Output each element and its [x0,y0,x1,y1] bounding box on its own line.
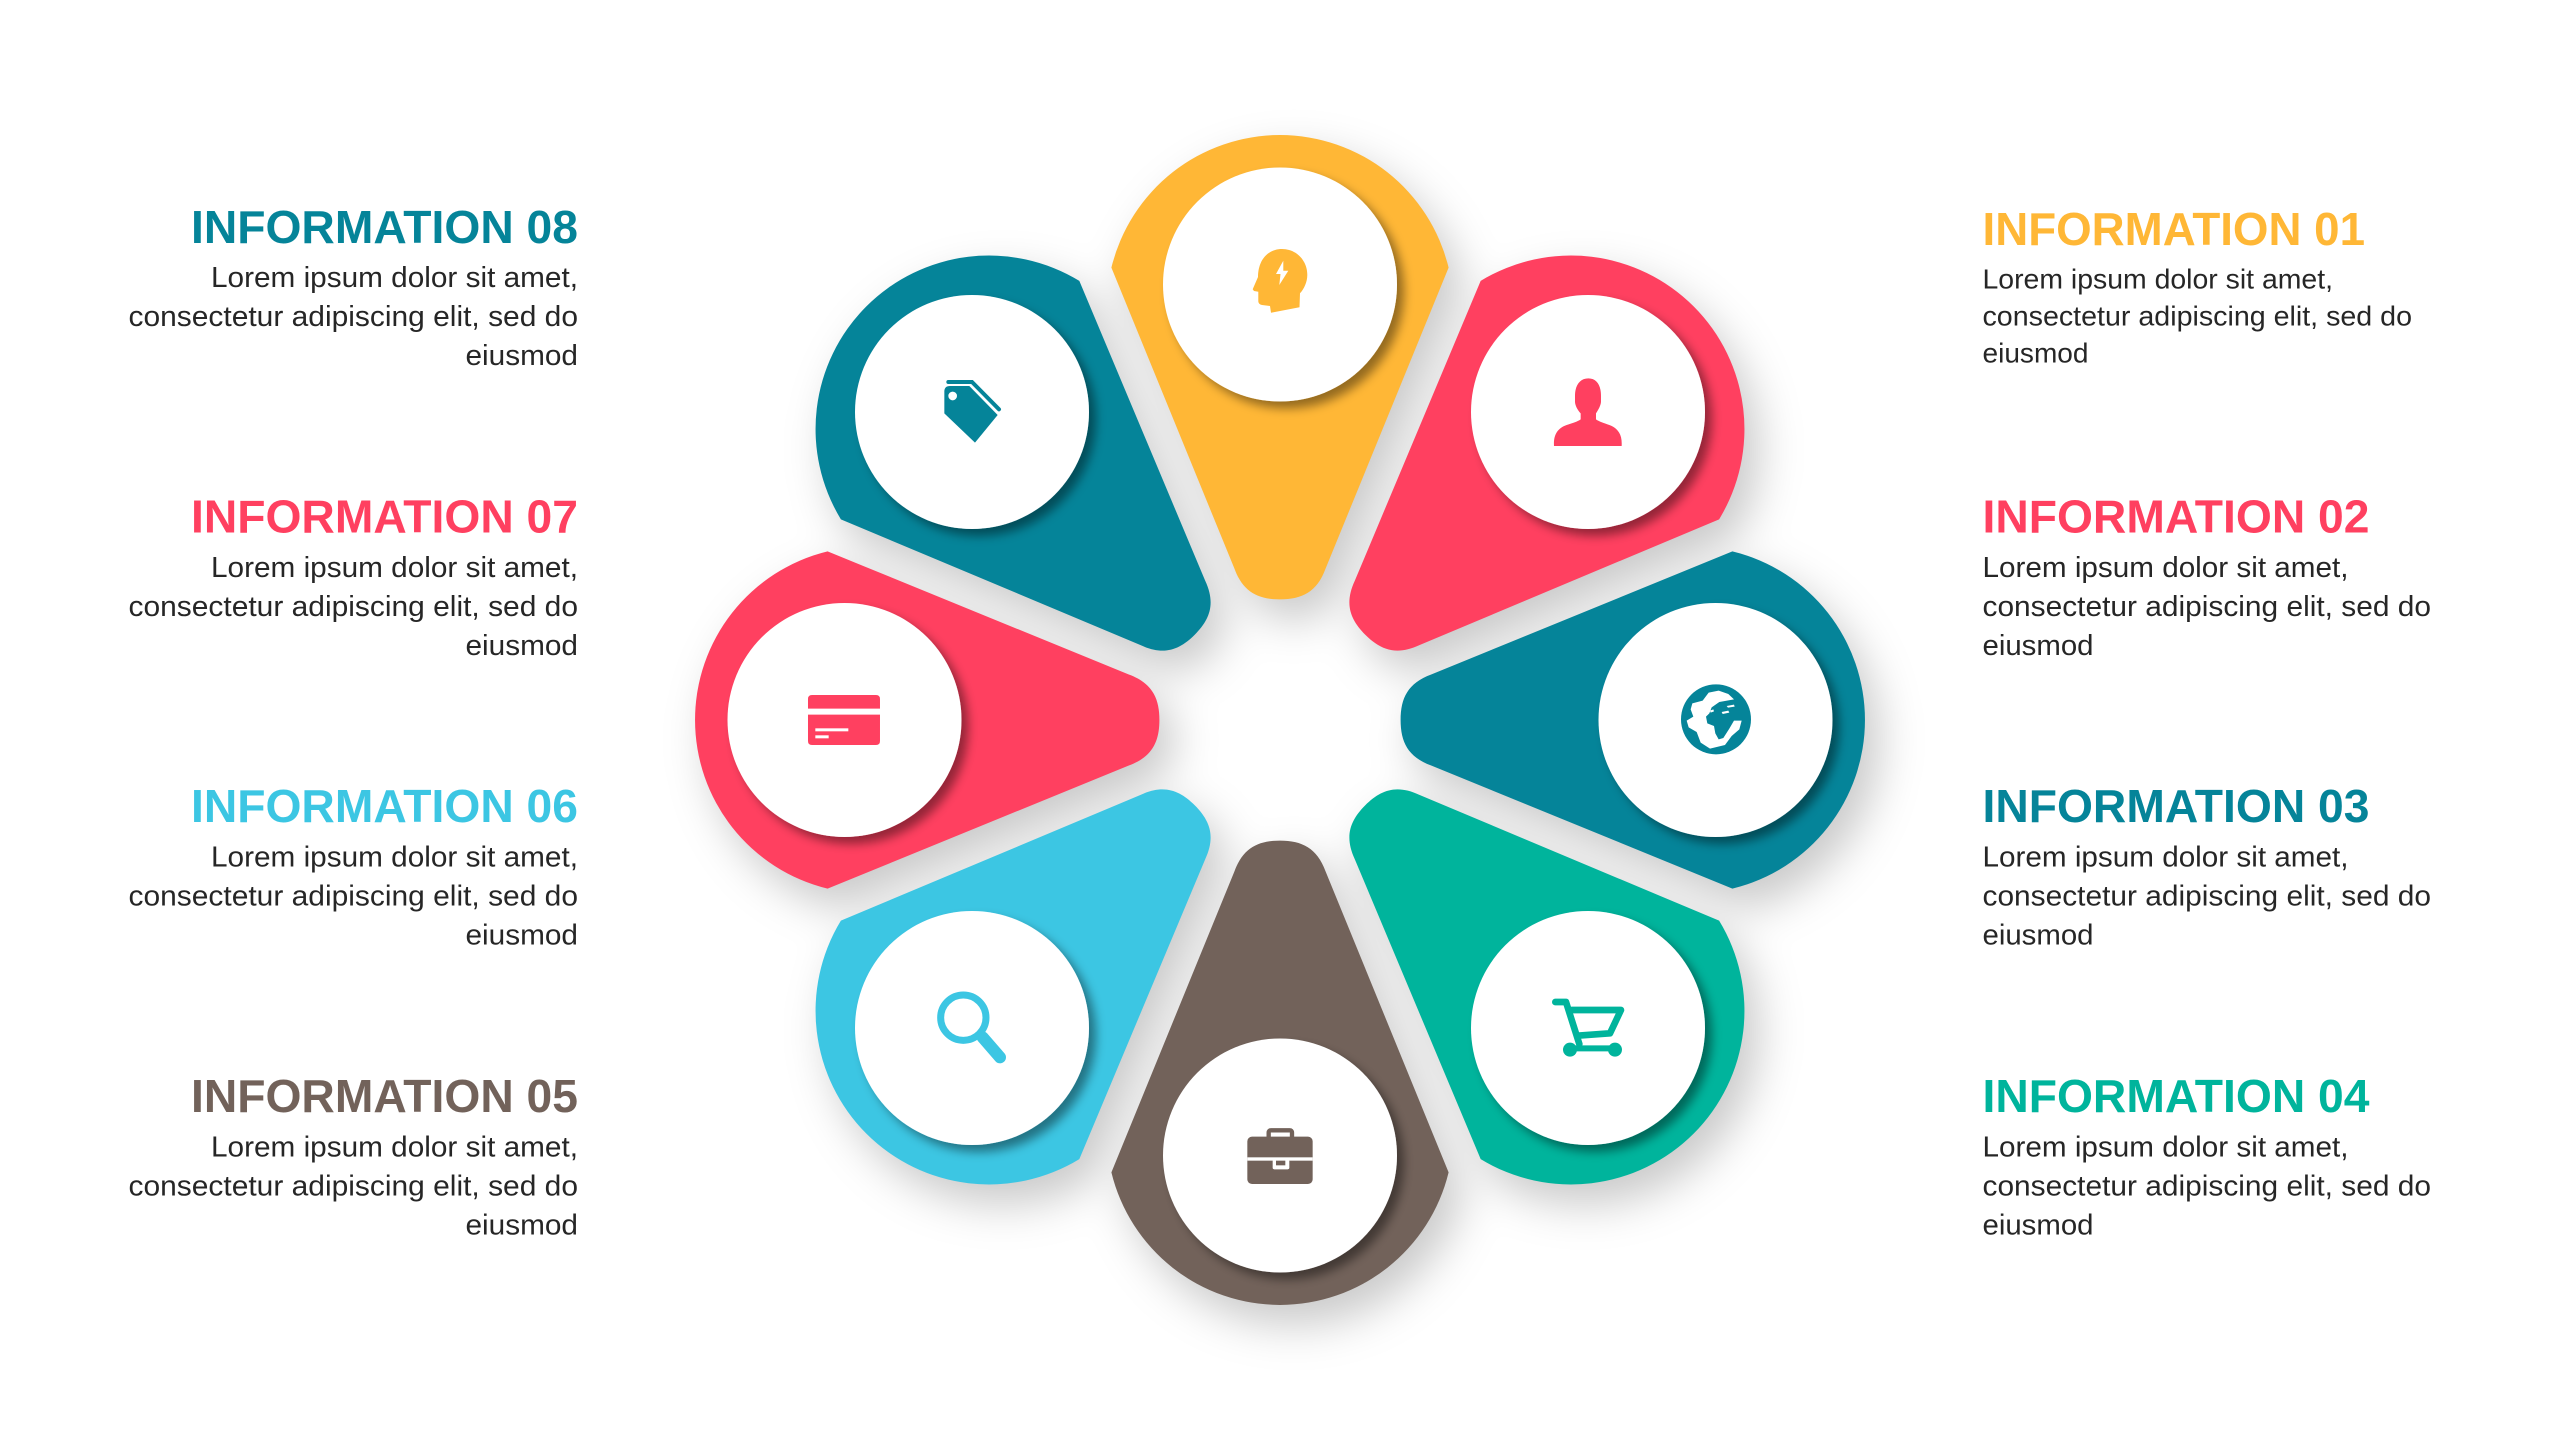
body 05: eiusmod [466,1209,578,1241]
text block: information 04 [1982,1070,2431,1241]
text block: information 08 [128,201,578,372]
heading 01: INFORMATION 01 [1982,203,2365,255]
body 03: eiusmod [1982,920,2094,952]
text block: information 05 [128,1070,578,1241]
body 04: Lorem ipsum dolor sit amet, [1982,1131,2348,1163]
white circle 01 [1163,168,1397,402]
icon: shopping cart [1555,1002,1622,1057]
body 02: eiusmod [1982,630,2094,662]
white circle 08 [855,295,1089,529]
body 01: Lorem ipsum dolor sit amet, [1982,264,2333,295]
text block: information 02 [1982,490,2431,662]
white circle 02 [1471,295,1705,529]
text block: information 03 [1982,780,2431,952]
body 02 [1982,552,2431,662]
body 08 [128,262,578,372]
panel: petal 08 teal [747,187,1314,754]
text block: information 07 [128,490,578,662]
body 07 [128,552,578,662]
body 03: consectetur adipiscing elit, sed do [1982,881,2431,913]
heading 02: INFORMATION 02 [1982,490,2370,542]
panel: petal 04 green [1246,686,1813,1253]
body 08: Lorem ipsum dolor sit amet, [211,262,578,294]
icon: briefcase [1247,1130,1313,1184]
heading 05: INFORMATION 05 [191,1070,578,1122]
body 04: eiusmod [1982,1209,2094,1241]
body 03 [1982,842,2431,952]
heading 04: INFORMATION 04 [1982,1070,2370,1122]
body 01 [1982,264,2412,368]
panel: petal 02 pink [1246,187,1813,754]
body 06 [128,842,578,952]
body 07: eiusmod [466,630,578,662]
body 02: consectetur adipiscing elit, sed do [1982,591,2431,623]
text block: information 01 [1982,203,2412,368]
heading 03: INFORMATION 03 [1982,780,2370,832]
icon: credit card [808,695,880,745]
white circle 04 [1471,911,1705,1145]
white circle 06 [855,911,1089,1145]
body 06: Lorem ipsum dolor sit amet, [211,842,578,874]
icon: magnifying glass [941,995,1000,1057]
icon: price tag [944,382,999,443]
panel: petal 03 teal [1401,551,1865,889]
white circle 03 [1598,603,1832,837]
heading 06: INFORMATION 06 [191,780,578,832]
body 06: consectetur adipiscing elit, sed do [128,881,578,913]
heading 08: INFORMATION 08 [191,201,578,253]
icon: globe [1681,684,1751,754]
panel: petal 01 yellow [1111,135,1449,599]
body 03: Lorem ipsum dolor sit amet, [1982,842,2348,874]
body 05 [128,1131,578,1241]
body 05: consectetur adipiscing elit, sed do [128,1170,578,1202]
icon: head with lightning bolt [1253,249,1307,313]
body 08: eiusmod [466,340,578,372]
body 08: consectetur adipiscing elit, sed do [128,301,578,333]
white circle 07 [728,603,962,837]
body 04 [1982,1131,2431,1241]
white circle 05 [1163,1038,1397,1272]
body 04: consectetur adipiscing elit, sed do [1982,1170,2431,1202]
text block: information 06 [128,780,578,952]
panel: petal 07 pink [695,551,1159,889]
icon: person [1554,378,1622,446]
panel: petal 06 cyan [747,686,1314,1253]
panel: petal 05 brown [1111,841,1449,1305]
heading 07: INFORMATION 07 [191,490,578,542]
body 07: consectetur adipiscing elit, sed do [128,591,578,623]
body 05: Lorem ipsum dolor sit amet, [211,1131,578,1163]
body 07: Lorem ipsum dolor sit amet, [211,552,578,584]
body 01: eiusmod [1982,337,2088,368]
body 01: consectetur adipiscing elit, sed do [1982,300,2412,332]
body 02: Lorem ipsum dolor sit amet, [1982,552,2348,584]
body 06: eiusmod [466,920,578,952]
